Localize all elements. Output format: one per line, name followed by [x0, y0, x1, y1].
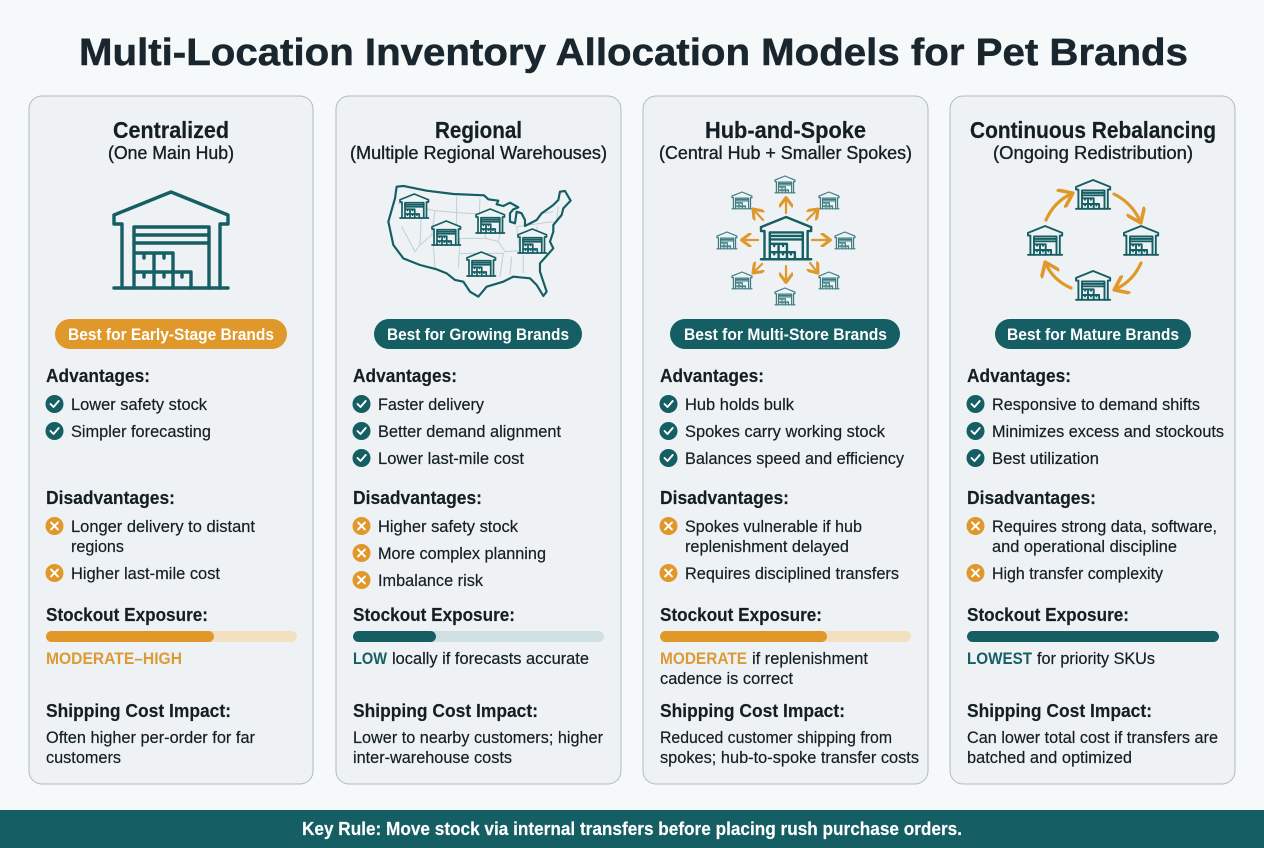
- disadvantage item: Higher last-mile cost: [71, 564, 220, 583]
- shipping cost text: inter-warehouse costs: [353, 748, 512, 767]
- exposure label: LOW: [353, 649, 388, 668]
- heading: advantages: Advantages:: [46, 366, 150, 386]
- shipping cost text: batched and optimized: [967, 748, 1132, 767]
- icon: warehouse: [114, 192, 228, 288]
- heading: shipping cost impact: Shipping Cost Impact:: [353, 701, 538, 721]
- exposure bar: [967, 631, 1219, 642]
- disadvantage item: Requires strong data, software,: [992, 517, 1217, 536]
- exposure label: [660, 649, 868, 688]
- panel: centralized: [29, 96, 313, 784]
- advantage item: Faster delivery: [378, 395, 484, 414]
- heading: advantages: Advantages:: [353, 366, 457, 386]
- badge: mature brands: [995, 319, 1191, 349]
- heading: regional: Regional: [435, 117, 522, 143]
- heading: hub-and-spoke: Hub-and-Spoke: [705, 117, 866, 143]
- disadvantage item: Longer delivery to distant: [71, 517, 255, 536]
- exposure label: [967, 649, 1155, 668]
- advantage item: Spokes carry working stock: [685, 422, 885, 441]
- exposure bar: [353, 631, 604, 642]
- disadvantage item: More complex planning: [378, 544, 546, 563]
- disadvantage item: High transfer complexity: [992, 564, 1163, 583]
- badge: multi-store brands: Best for Multi-Store Brands: [684, 325, 887, 344]
- subheading: one main hub: (One Main Hub): [108, 143, 234, 163]
- shipping cost text: [46, 728, 255, 767]
- advantage item: Lower last-mile cost: [378, 449, 524, 468]
- badge: growing brands: Best for Growing Brands: [387, 325, 569, 344]
- shipping cost text: Reduced customer shipping from: [660, 728, 892, 747]
- exposure label: for priority SKUs: [1037, 649, 1155, 668]
- shipping cost text: Often higher per-order for far: [46, 728, 255, 747]
- advantage item: Responsive to demand shifts: [992, 395, 1200, 414]
- subheading: central hub + smaller spokes: (Central Hub + Smaller Spokes): [659, 143, 912, 163]
- badge: growing brands: [374, 319, 582, 349]
- subheading: multiple regional warehouses: (Multiple Regional Warehouses): [350, 143, 607, 163]
- icon: hub with spokes and arrows: [717, 176, 855, 305]
- badge: early-stage brands: Best for Early-Stage Brands: [68, 325, 274, 344]
- exposure label: LOWEST: [967, 649, 1033, 668]
- shipping cost text: spokes; hub-to-spoke transfer costs: [660, 748, 919, 767]
- footer: key rule banner: [0, 810, 1264, 848]
- icon: warehouses in a cycle: [1028, 180, 1158, 300]
- shipping cost text: [353, 728, 603, 767]
- disadvantage item: Requires disciplined transfers: [685, 564, 899, 583]
- heading: stockout exposure: Stockout Exposure:: [660, 605, 822, 625]
- heading: shipping cost impact: Shipping Cost Impact:: [967, 701, 1152, 721]
- disadvantage item: regions: [71, 537, 124, 556]
- footer: key rule banner: Key Rule: Move stock via internal transfers before placing rush purchase orders.: [302, 819, 962, 839]
- exposure label: MODERATE: [660, 649, 747, 668]
- heading: disadvantages: Disadvantages:: [353, 488, 482, 508]
- disadvantage item: [660, 517, 862, 556]
- heading: stockout exposure: Stockout Exposure:: [967, 605, 1129, 625]
- advantage item: Lower safety stock: [71, 395, 207, 414]
- advantage item: Best utilization: [992, 449, 1099, 468]
- exposure label: cadence is correct: [660, 669, 793, 688]
- badge: mature brands: Best for Mature Brands: [1007, 325, 1179, 344]
- exposure label: if replenishment: [752, 649, 868, 668]
- panel: hub-and-spoke: [643, 96, 928, 784]
- heading: shipping cost impact: Shipping Cost Impact:: [46, 701, 231, 721]
- shipping cost text: customers: [46, 748, 121, 767]
- heading: disadvantages: Disadvantages:: [660, 488, 789, 508]
- exposure label: MODERATE–HIGH: [46, 649, 182, 668]
- panel: regional: [336, 96, 621, 784]
- shipping cost text: Lower to nearby customers; higher: [353, 728, 603, 747]
- shipping cost text: [967, 728, 1218, 767]
- heading: disadvantages: Disadvantages:: [967, 488, 1096, 508]
- disadvantage item: [46, 517, 255, 556]
- heading: centralized: Centralized: [113, 117, 229, 143]
- disadvantage item: Imbalance risk: [378, 571, 483, 590]
- heading: shipping cost impact: Shipping Cost Impact:: [660, 701, 845, 721]
- heading: continuous rebalancing: Continuous Rebalancing: [970, 117, 1216, 143]
- heading: advantages: Advantages:: [967, 366, 1071, 386]
- shipping cost text: [660, 728, 919, 767]
- disadvantage item: Higher safety stock: [378, 517, 518, 536]
- advantage item: Balances speed and efficiency: [685, 449, 904, 468]
- heading: stockout exposure: Stockout Exposure:: [353, 605, 515, 625]
- advantage item: Hub holds bulk: [685, 395, 794, 414]
- badge: early-stage brands: [55, 319, 287, 349]
- exposure bar: [46, 631, 297, 642]
- disadvantage item: and operational discipline: [992, 537, 1177, 556]
- subheading: ongoing redistribution: (Ongoing Redistribution): [993, 143, 1193, 163]
- advantage item: Better demand alignment: [378, 422, 561, 441]
- heading: advantages: Advantages:: [660, 366, 764, 386]
- disadvantage item: [966, 517, 1217, 556]
- exposure label: locally if forecasts accurate: [392, 649, 589, 668]
- advantage item: Minimizes excess and stockouts: [992, 422, 1224, 441]
- badge: multi-store brands: [670, 319, 900, 349]
- panel: continuous rebalancing: [950, 96, 1235, 784]
- shipping cost text: Can lower total cost if transfers are: [967, 728, 1218, 747]
- advantage item: Simpler forecasting: [71, 422, 211, 441]
- heading: disadvantages: Disadvantages:: [46, 488, 175, 508]
- heading: stockout exposure: Stockout Exposure:: [46, 605, 208, 625]
- disadvantage item: Spokes vulnerable if hub: [685, 517, 862, 536]
- icon: US map with warehouses: [388, 186, 571, 297]
- disadvantage item: replenishment delayed: [685, 537, 849, 556]
- exposure bar: [660, 631, 911, 642]
- title: Multi-Location Inventory Allocation Models for Pet Brands: [79, 32, 1188, 74]
